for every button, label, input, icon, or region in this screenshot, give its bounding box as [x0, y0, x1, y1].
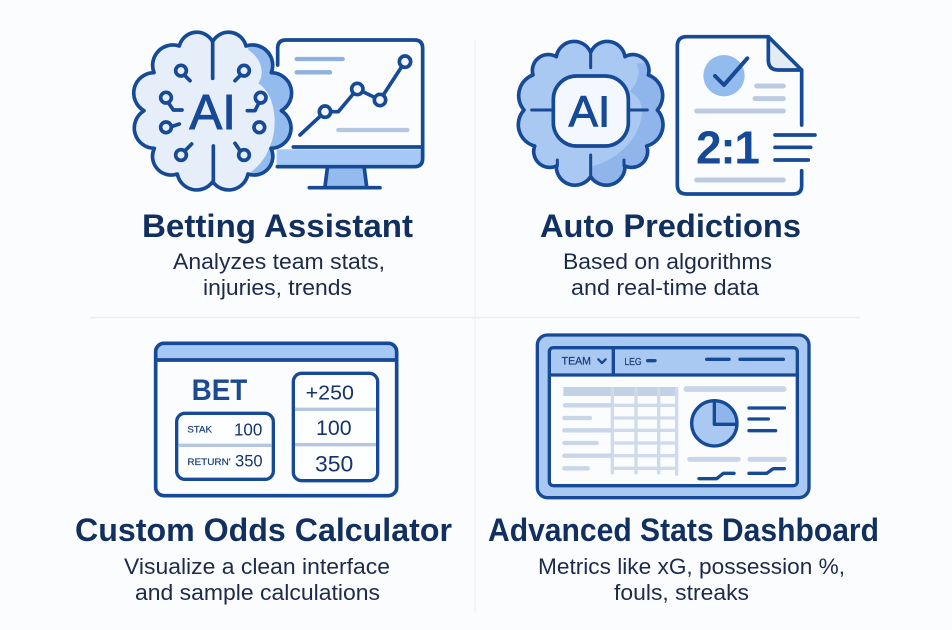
icon: monitor with line chart: [277, 40, 423, 188]
icon: prediction document: 2:1: [696, 121, 760, 173]
icon: odds calculator window: BET: [192, 374, 247, 407]
text: betting assistant description: injuries, trends: [203, 275, 352, 300]
icon: dashboard window: TEAM: [562, 355, 591, 367]
data table: [563, 387, 677, 476]
icon: AI brain with circuit nodes: [130, 27, 297, 197]
icon: dashboard window: LEG: [624, 357, 642, 368]
heading: Betting Assistant: Betting Assistant: [142, 208, 413, 244]
panel: betting assistant: [130, 27, 423, 300]
heading: Advanced Stats Dashboard: Advanced Stats Dashboard: [488, 512, 879, 548]
text: auto predictions description: Based on algorithms: [563, 249, 772, 274]
text: dashboard description: fouls, streaks: [614, 580, 749, 605]
panel: advanced stats dashboard: [488, 335, 879, 605]
stake and return box: STAK: [187, 424, 212, 434]
text: calculator description: Visualize a clean interface: [124, 554, 390, 579]
panel: auto predictions: [513, 33, 815, 300]
icon: prediction document: [677, 37, 815, 194]
icon: AI brain with circuit nodes: AI: [189, 85, 236, 140]
stake and return box: 350: [235, 452, 263, 471]
heading: Auto Predictions: Auto Predictions: [540, 208, 801, 244]
heading: Custom Odds Calculator: Custom Odds Calculator: [75, 512, 452, 548]
odds column box: +250: [306, 381, 354, 404]
icon: dashboard window: [537, 335, 809, 498]
text: auto predictions description: and real-time data: [571, 275, 760, 300]
panel: custom odds calculator: [75, 343, 452, 605]
stake and return box: RETURN': [187, 457, 231, 467]
text: calculator description: and sample calculations: [135, 580, 380, 605]
pie chart: [692, 401, 737, 446]
stake and return box: 100: [234, 420, 262, 440]
text: dashboard description: Metrics like xG, possession %,: [538, 554, 845, 579]
text: betting assistant description: Analyzes team stats,: [173, 249, 385, 274]
icon: AI chip brain: AI: [569, 88, 610, 137]
odds column box: 100: [316, 416, 352, 440]
stake and return box: [177, 413, 273, 479]
icon: AI chip brain: [516, 40, 665, 187]
odds column box: 350: [315, 451, 353, 476]
odds column box: [293, 373, 378, 481]
icon: odds calculator window: [156, 343, 397, 496]
